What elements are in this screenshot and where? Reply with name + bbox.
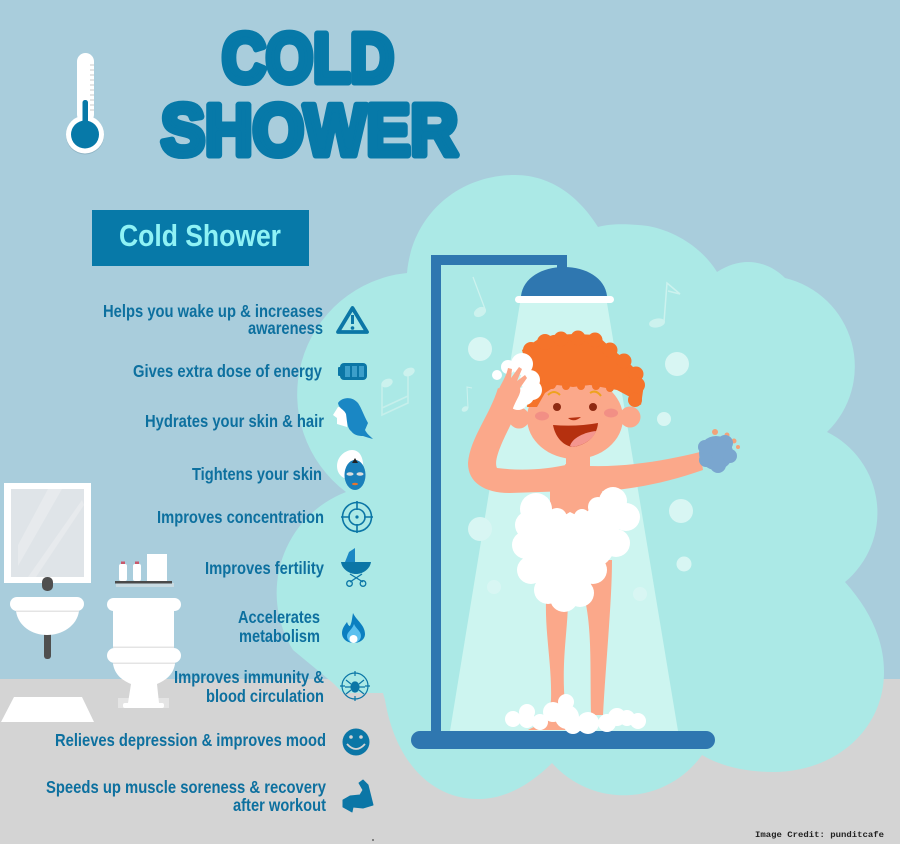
- benefit 4: Tightens your skin: [192, 464, 322, 484]
- benefit 7: metabolism: [239, 626, 320, 646]
- toilet: [107, 598, 181, 708]
- mirror: [4, 483, 91, 583]
- facial features: [535, 392, 618, 447]
- benefit 5: Improves concentration: [157, 507, 324, 527]
- hair: [522, 330, 645, 407]
- icon: bug in crosshair: [340, 671, 370, 701]
- ears: [508, 406, 640, 428]
- benefit 1: awareness: [248, 318, 323, 338]
- benefit 8: blood circulation: [206, 686, 324, 706]
- bathroom scene: [1, 483, 181, 722]
- boy character: [468, 330, 740, 734]
- benefit 7: Accelerates: [238, 607, 320, 627]
- image credit: Image Credit: punditcafe: [755, 830, 884, 840]
- title: COLD: [222, 19, 394, 97]
- left arm and hand: [468, 388, 570, 493]
- icon: battery: [338, 363, 367, 380]
- icon: target: [341, 501, 373, 533]
- foot foam: [505, 694, 646, 734]
- bath mat: [1, 697, 94, 722]
- icon: warning triangle: [338, 308, 367, 332]
- icon: baby pram: [341, 548, 371, 586]
- icon: thermometer: [66, 53, 104, 154]
- title: SHOWER: [161, 91, 458, 171]
- shower light beam: [450, 303, 678, 731]
- benefit 8: [174, 667, 324, 706]
- benefit 1: [103, 301, 323, 338]
- soap bubbles: [468, 337, 693, 601]
- legs: [528, 560, 612, 730]
- benefit 1: Helps you wake up & increases: [103, 301, 323, 321]
- face: [527, 377, 623, 459]
- shower frame: [411, 255, 715, 749]
- body foam: [512, 487, 640, 612]
- torso: [550, 470, 605, 525]
- heading box: Cold Shower: [119, 218, 281, 253]
- icon: woman with long hair: [333, 398, 373, 439]
- hand with foam: [492, 353, 542, 412]
- title: [161, 19, 458, 171]
- icon: flame: [342, 613, 365, 643]
- benefit 3: Hydrates your skin & hair: [145, 411, 324, 431]
- benefit 7: [238, 607, 320, 646]
- sink: [10, 577, 84, 659]
- heading box: [92, 210, 309, 266]
- benefit 10: [46, 777, 326, 815]
- benefit 9: Relieves depression & improves mood: [55, 730, 326, 750]
- benefit 6: Improves fertility: [205, 558, 324, 578]
- benefit 10: Speeds up muscle soreness & recovery: [46, 777, 326, 797]
- benefit 2: Gives extra dose of energy: [133, 361, 322, 381]
- neck: [566, 450, 590, 472]
- right arm: [565, 452, 703, 492]
- cloud backdrop: [277, 175, 884, 799]
- icon: smiley: [342, 728, 370, 756]
- benefit 10: after workout: [233, 795, 326, 815]
- shelf with bottles: [115, 554, 174, 587]
- benefit 8: Improves immunity &: [174, 667, 324, 687]
- shower sponge: [698, 429, 740, 473]
- icon: flexed arm: [343, 780, 373, 812]
- icon: face mask: [337, 450, 366, 490]
- music notes: [380, 277, 680, 415]
